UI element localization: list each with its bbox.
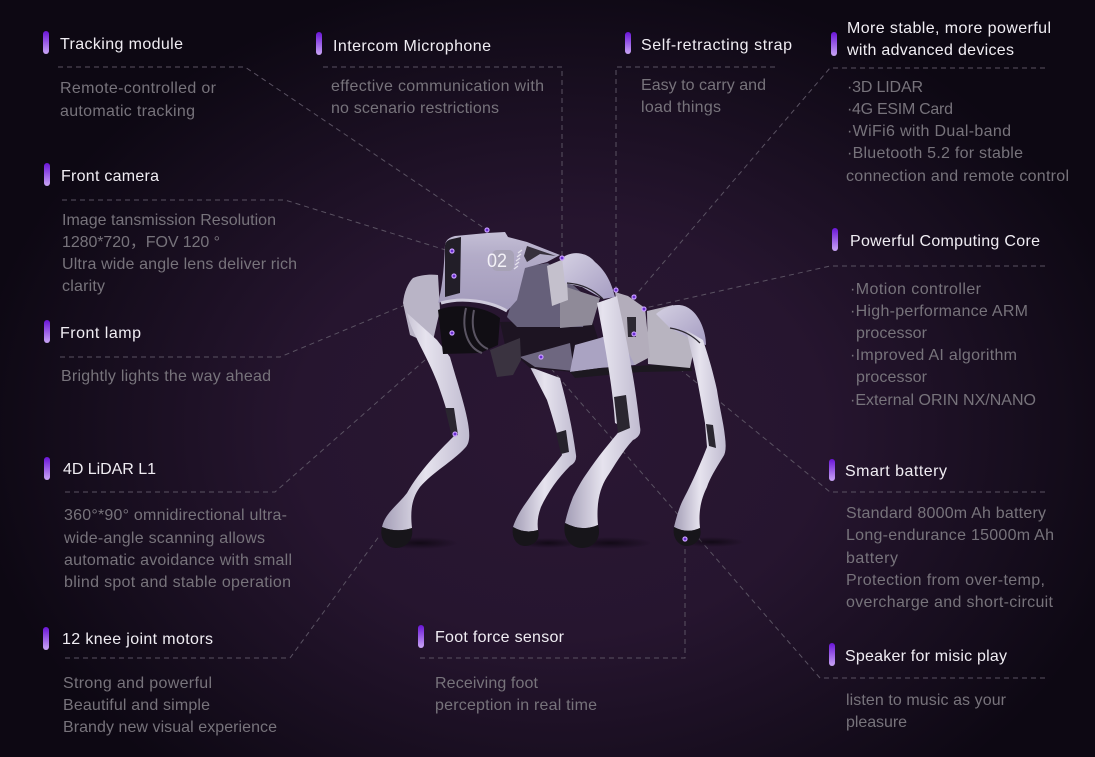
panel: tracking module: Tracking module: [60, 36, 183, 53]
rear hip cap: [656, 305, 706, 345]
panel: foot force sensor: Receiving foot: [435, 675, 539, 692]
panel: front lamp: [44, 320, 271, 385]
panel: 12 knee joint motors: Strong and powerful: [63, 675, 212, 692]
panel: front camera: clarity: [62, 278, 105, 295]
panel: 4D LiDAR L1: automatic avoidance with small: [64, 552, 292, 569]
panel: powerful computing core: processor: [856, 325, 928, 342]
panel: self-retracting strap: Easy to carry and: [641, 77, 766, 94]
panel: self-retracting strap: load things: [641, 99, 721, 116]
panel: 12 knee joint motors: [43, 627, 277, 736]
panel: powerful computing core: ·Improved AI algorithm: [850, 347, 1017, 364]
rear hip base: [647, 305, 695, 368]
panel: 4D LiDAR L1: 360°*90° omnidirectional ultra-: [64, 507, 287, 524]
panel: 4D LiDAR L1: wide-angle scanning allows: [63, 530, 265, 547]
panel: front camera: [44, 163, 297, 295]
panel: foot force sensor: perception in real time: [435, 697, 597, 714]
panel: advanced devices: ·Bluetooth 5.2 for stable: [847, 145, 1023, 162]
panel: speaker: Speaker for misic play: [845, 648, 1007, 665]
panel: self-retracting strap: [625, 32, 792, 116]
panel: powerful computing core: ·Motion controller: [850, 281, 982, 298]
front hip cap: [562, 253, 615, 299]
head vent: [524, 246, 556, 262]
underside bar: [570, 363, 692, 378]
panel: smart battery: [829, 459, 1054, 611]
hip seam: [567, 283, 700, 343]
panel: self-retracting strap: Self-retracting strap: [641, 37, 792, 54]
panel: intercom microphone: no scenario restrictions: [331, 100, 499, 117]
panel: powerful computing core: Powerful Computing Core: [850, 233, 1040, 250]
panel: front camera: Image tansmission Resolution: [62, 212, 276, 229]
panel: 12 knee joint motors: Brandy new visual experience: [63, 719, 277, 736]
head number: 02: [487, 251, 507, 272]
panel: 4D LiDAR L1: blind spot and stable operation: [64, 574, 291, 591]
panel: tracking module: Remote-controlled or: [60, 80, 217, 97]
belly dark underside: [500, 320, 600, 372]
panel: smart battery: Protection from over-temp,: [846, 572, 1045, 589]
panel: 12 knee joint motors: Beautiful and simple: [63, 697, 210, 714]
panel: speaker: listen to music as your: [846, 692, 1007, 709]
shoulder band: [547, 258, 568, 306]
front panel: [445, 237, 461, 297]
panel: smart battery: Standard 8000m Ah battery: [846, 505, 1046, 522]
mechanism base: [560, 285, 600, 328]
panel: advanced devices: connection and remote control: [846, 168, 1069, 185]
panel: tracking module: automatic tracking: [60, 103, 195, 120]
head stripes: [514, 250, 522, 269]
panel: intercom microphone: Intercom Microphone: [333, 38, 491, 55]
foot shadows: [382, 537, 744, 549]
rear near leg: [674, 330, 726, 546]
panel: front camera: Ultra wide angle lens deliver rich: [62, 256, 297, 273]
panel: advanced devices: with advanced devices: [846, 42, 1014, 59]
neck and mechanism: [507, 263, 590, 327]
rear belly: [570, 320, 650, 372]
hotspots: [450, 228, 687, 541]
panel: speaker: pleasure: [846, 714, 907, 731]
panel: 12 knee joint motors: 12 knee joint motors: [62, 631, 213, 648]
panel: smart battery: Smart battery: [845, 463, 947, 480]
panel: powerful computing core: [832, 228, 1040, 409]
rear plate: [615, 292, 650, 365]
head: [438, 232, 560, 310]
panel: foot force sensor: Foot force sensor: [435, 629, 565, 646]
sensor dome: [438, 306, 500, 354]
panel: advanced devices: ·3D LIDAR: [847, 79, 923, 96]
panel: powerful computing core: ·External ORIN NX/NANO: [850, 392, 1036, 409]
panel: powerful computing core: ·High-performance ARM: [850, 303, 1028, 320]
panel: 4D LiDAR L1: 4D LiDAR L1: [63, 461, 156, 478]
panel: smart battery: Long-endurance 15000m Ah: [846, 527, 1054, 544]
panel: intercom microphone: [316, 32, 544, 117]
panel: advanced devices: ·4G ESIM Card: [847, 101, 953, 118]
dome guard: [464, 308, 488, 353]
robot dog illustration: [381, 228, 744, 549]
panel: smart battery: battery: [846, 550, 898, 567]
panel: advanced devices: [831, 20, 1069, 185]
chest block: [490, 338, 521, 377]
panel: powerful computing core: processor: [856, 369, 928, 386]
panel: tracking module: [43, 31, 217, 120]
belly lavender: [520, 343, 574, 371]
front near leg: [564, 296, 640, 548]
side slot: [627, 317, 636, 337]
number plate: [492, 250, 514, 271]
panel: front camera: 1280*720，FOV 120 °: [62, 234, 220, 251]
panel: advanced devices: More stable, more powerful: [847, 20, 1051, 37]
panel: front camera: Front camera: [61, 168, 159, 185]
panel: advanced devices: ·WiFi6 with Dual-band: [847, 123, 1011, 140]
panel: smart battery: overcharge and short-circuit: [846, 594, 1054, 611]
panel: front lamp: Front lamp: [60, 325, 141, 342]
head rim: [441, 300, 507, 311]
rear far leg: [513, 367, 576, 546]
panel: foot force sensor: [418, 625, 597, 714]
front left leg: [381, 313, 469, 548]
front far shoulder: [403, 275, 440, 345]
connector lines: [58, 67, 1045, 678]
panel: 4D LiDAR L1: [44, 457, 292, 591]
panel: intercom microphone: effective communication with: [331, 78, 544, 95]
panel: speaker: [829, 643, 1007, 731]
panel: front lamp: Brightly lights the way ahead: [61, 368, 271, 385]
